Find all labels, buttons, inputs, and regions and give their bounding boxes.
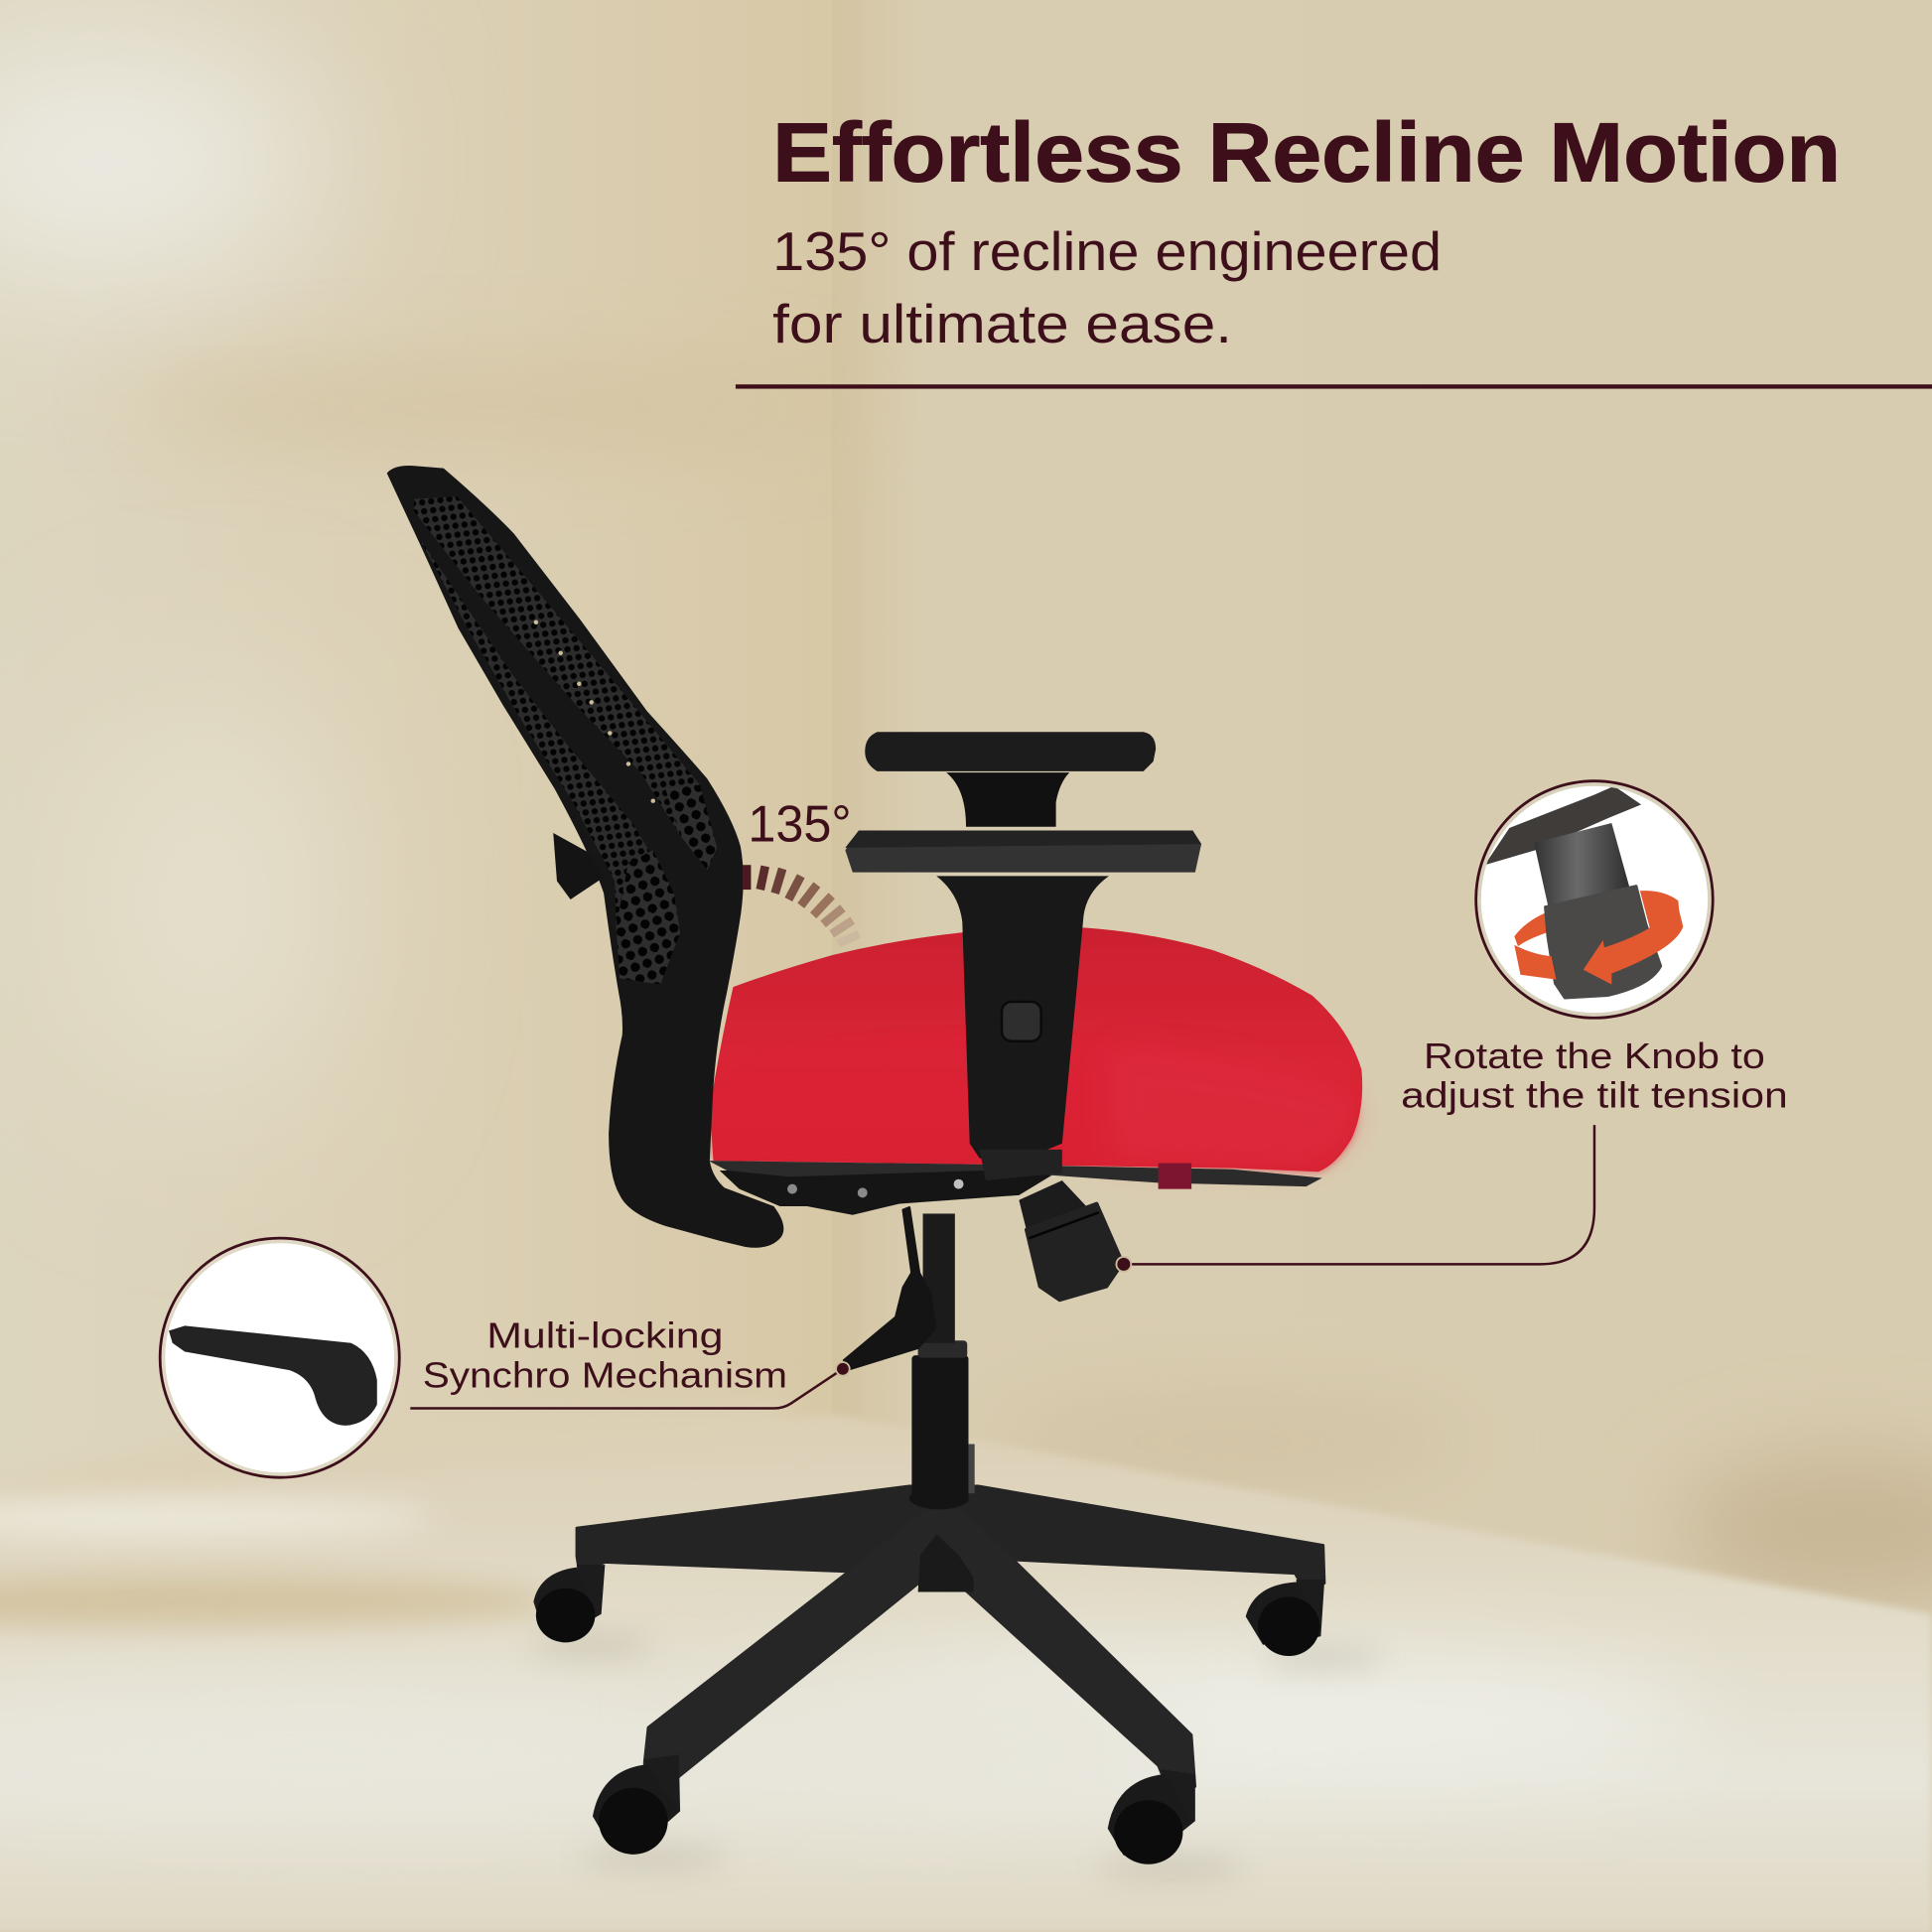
knob caption: adjust the tilt tension xyxy=(1401,1075,1788,1116)
caster shadows xyxy=(530,1637,1386,1876)
backrest mesh: upper band xyxy=(414,496,717,870)
caster: rear left xyxy=(533,1565,605,1642)
gas column xyxy=(909,1213,975,1509)
knob caption: Rotate the Knob to xyxy=(1424,1035,1765,1076)
subtitle: 135° of recline engineered xyxy=(772,221,1442,282)
lever caption: Synchro Mechanism xyxy=(423,1354,787,1395)
subtitle: for ultimate ease. xyxy=(772,294,1232,354)
knob collar xyxy=(1545,886,1661,998)
seat mechanism xyxy=(720,1171,1059,1215)
inset: lever handle xyxy=(160,1238,399,1477)
header rule xyxy=(736,384,1932,389)
caster: front right xyxy=(1108,1769,1195,1864)
leader line: knob xyxy=(1116,1125,1594,1272)
knob shaft xyxy=(1534,823,1630,909)
subtitle xyxy=(772,221,1442,354)
backrest shell xyxy=(387,466,783,1248)
knob caption xyxy=(1401,1035,1788,1116)
tilt lever xyxy=(844,1207,935,1369)
orange band rear xyxy=(1640,891,1680,928)
mechanism bolts xyxy=(787,1179,964,1197)
arm button xyxy=(1002,1002,1041,1041)
inset: tension knob xyxy=(1476,781,1713,1018)
recline arc ticks xyxy=(747,865,859,944)
chair plate xyxy=(1484,786,1641,865)
caster: rear right xyxy=(1246,1580,1324,1656)
lumbar knob xyxy=(553,833,604,899)
chair base xyxy=(577,1486,1324,1787)
tension knob xyxy=(1019,1180,1123,1300)
orange arrow xyxy=(1514,945,1556,980)
backrest mesh: large cells xyxy=(617,785,717,985)
recline angle label: 135° xyxy=(748,796,852,854)
title: Effortless Recline Motion xyxy=(772,105,1841,199)
handle xyxy=(169,1325,377,1426)
caster: front left xyxy=(593,1754,680,1855)
lever caption xyxy=(423,1315,787,1395)
rear armrest xyxy=(865,732,1156,827)
lever caption: Multi-locking xyxy=(486,1315,724,1356)
chair xyxy=(387,466,1362,1864)
mesh light holes xyxy=(534,621,655,803)
leader line: lever xyxy=(410,1362,850,1409)
backrest mesh: lower band xyxy=(420,540,680,985)
front armrest xyxy=(845,830,1201,1180)
seat cushion xyxy=(709,926,1362,1189)
